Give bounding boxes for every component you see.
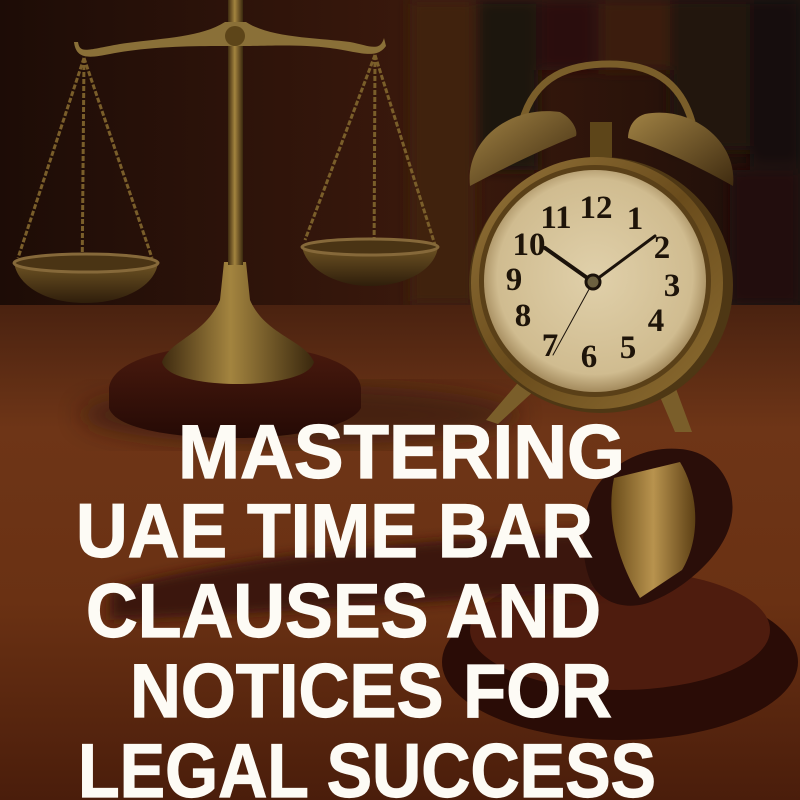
scale brass foot	[162, 262, 314, 384]
background books	[410, 0, 800, 305]
clock numerals: 9	[506, 262, 522, 298]
gavel handle	[110, 530, 620, 620]
clock numerals: 4	[648, 303, 664, 339]
clock right bell	[628, 113, 733, 186]
clock left bell	[470, 111, 576, 186]
gavel sound block	[442, 584, 798, 740]
icon: balance scale	[14, 0, 438, 438]
clock numerals: 8	[515, 298, 531, 334]
title	[76, 410, 656, 800]
title: MASTERING	[178, 410, 625, 495]
clock top knob	[590, 122, 612, 158]
left chains	[18, 58, 152, 285]
title: NOTICES FOR	[130, 649, 612, 734]
right chains	[305, 55, 435, 265]
clock numerals: 12	[580, 190, 612, 226]
right pan	[302, 239, 438, 286]
title: UAE TIME BAR	[76, 489, 593, 574]
scale wooden base	[109, 345, 361, 438]
title: CLAUSES AND	[86, 569, 601, 654]
background wall	[0, 0, 800, 310]
gavel head	[583, 449, 733, 606]
clock numerals: 11	[540, 200, 572, 236]
clock case	[469, 157, 733, 413]
clock numerals: 2	[654, 230, 670, 266]
clock numerals: 5	[620, 330, 636, 366]
icon: gavel	[110, 449, 798, 740]
clock numerals	[506, 190, 680, 375]
clock face	[484, 170, 706, 392]
scale beam	[74, 22, 386, 57]
clock handle	[522, 64, 692, 122]
clock feet	[486, 378, 692, 432]
left pan	[14, 254, 158, 303]
icon: alarm clock	[469, 64, 733, 432]
gavel gold band	[611, 462, 695, 598]
scale shadow on table	[80, 385, 520, 445]
clock numerals: 3	[664, 268, 680, 304]
clock hands	[545, 236, 655, 355]
clock numerals: 10	[512, 227, 546, 263]
clock numerals: 7	[542, 328, 558, 364]
table	[0, 305, 800, 800]
clock numerals: 6	[581, 339, 597, 375]
scale pole	[228, 0, 243, 265]
clock numerals: 1	[627, 201, 643, 237]
